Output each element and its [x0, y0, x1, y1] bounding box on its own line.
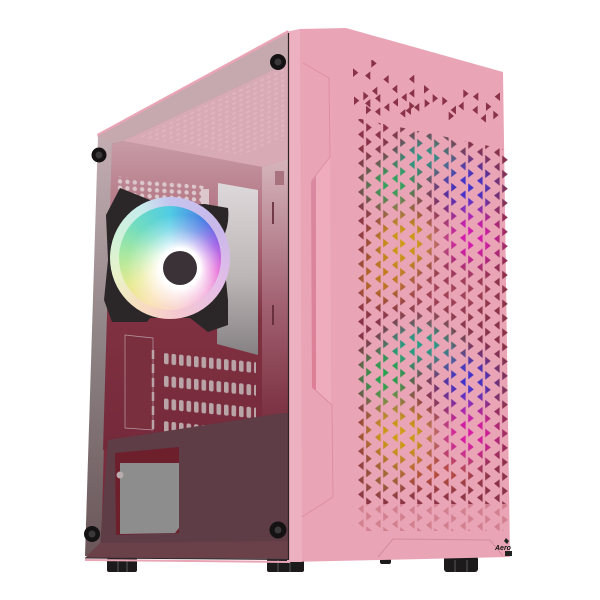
IO plate [125, 335, 153, 430]
bottom trim [378, 539, 503, 557]
back wall [103, 141, 262, 450]
fan hub [163, 251, 197, 285]
PSU cutout [120, 463, 179, 534]
expansion slots [163, 350, 256, 440]
side strip [286, 29, 302, 562]
glass right edge [288, 33, 290, 560]
motherboard cutout [217, 183, 258, 355]
recess shadow [311, 176, 316, 390]
glass frame band [98, 33, 288, 144]
logo [494, 538, 512, 556]
ceiling [123, 63, 288, 167]
glass bottom edge [85, 558, 288, 560]
bottom sill [85, 541, 289, 559]
feet [107, 556, 478, 572]
right inner wall [262, 159, 288, 420]
inner white glow [119, 206, 221, 310]
left glass edge [85, 136, 112, 556]
rainbow blades [119, 206, 221, 310]
power supply shroud [100, 413, 288, 546]
PSU frame [115, 447, 179, 535]
closed bottom mesh triangles [358, 504, 510, 531]
moulded recess [312, 157, 331, 405]
RGB fan ring [110, 197, 230, 319]
glass screws [84, 54, 286, 542]
top pink edge [97, 30, 289, 138]
illustration: pink PC case [84, 28, 512, 572]
fan frame [104, 188, 228, 332]
side glass window [85, 30, 290, 562]
wall vent dots [115, 176, 205, 215]
mesh colour glow through perforations [353, 60, 508, 504]
case body drawing [84, 28, 512, 572]
interior base [101, 62, 288, 545]
logo: Aero [494, 545, 512, 552]
front panel [286, 28, 510, 562]
